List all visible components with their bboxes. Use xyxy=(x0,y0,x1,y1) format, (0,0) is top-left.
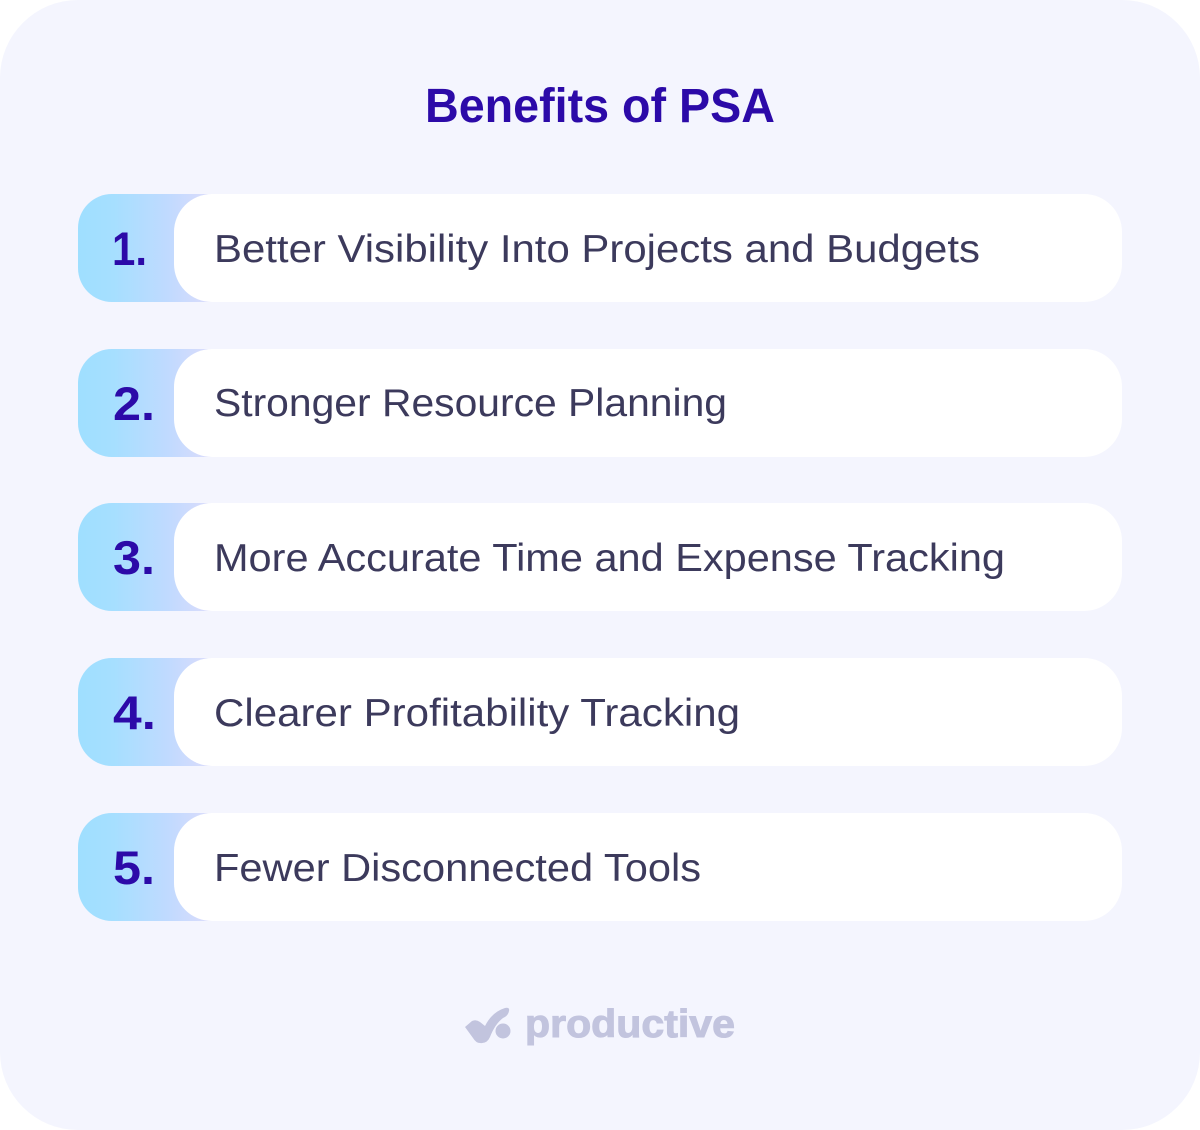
icon: check mark xyxy=(465,1008,510,1043)
list item 3 xyxy=(78,503,1122,611)
logo: productive xyxy=(465,1003,735,1046)
item card 1 xyxy=(174,194,1122,302)
item card 3 xyxy=(174,503,1122,611)
number badge 4 xyxy=(78,658,258,766)
item card 4 xyxy=(174,658,1122,766)
number 2: 2. xyxy=(113,377,155,430)
item text 4: Clearer Profitability Tracking xyxy=(214,692,740,735)
item card 5 xyxy=(174,813,1122,921)
number badge 1 xyxy=(78,194,258,302)
list item 4 xyxy=(78,658,1122,766)
item text 3: More Accurate Time and Expense Tracking xyxy=(214,537,1005,580)
number 3: 3. xyxy=(113,531,155,584)
number 1: 1. xyxy=(112,222,147,275)
list item 5 xyxy=(78,813,1122,921)
item text 1: Better Visibility Into Projects and Budgets xyxy=(214,228,980,271)
number 4: 4. xyxy=(113,686,156,739)
list item 2 xyxy=(78,349,1122,457)
item text 5: Fewer Disconnected Tools xyxy=(214,847,701,890)
item card 2 xyxy=(174,349,1122,457)
number badge 2 xyxy=(78,349,258,457)
item text 2: Stronger Resource Planning xyxy=(214,382,727,425)
title: Benefits of PSA xyxy=(425,80,775,133)
list item 1 xyxy=(78,194,1122,302)
number 5: 5. xyxy=(113,841,155,894)
wordmark: productive xyxy=(525,1003,735,1046)
number badge 5 xyxy=(78,813,258,921)
number badge 3 xyxy=(78,503,258,611)
